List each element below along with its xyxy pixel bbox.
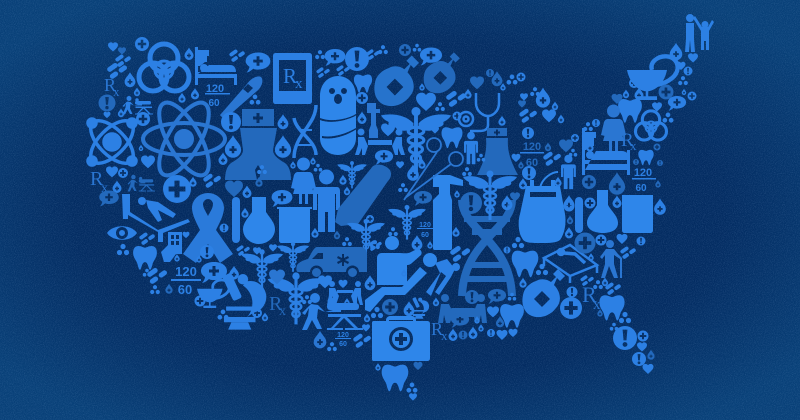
icon: two people carrying stretcher [327, 281, 363, 305]
small icons: exclamation circles [98, 47, 692, 366]
text: blood pressure south: 60 [339, 341, 347, 348]
icon: caduceus small 3 [347, 219, 385, 254]
icon: tooth northeast [618, 99, 642, 123]
icon: first aid kit [372, 316, 430, 361]
text: Rx northeast: R [621, 130, 634, 151]
icon: stethoscope [459, 93, 499, 131]
text: blood pressure gulf: 60 [421, 232, 429, 239]
icon: prescription tablet [273, 53, 312, 104]
icon: small microscope east [412, 297, 429, 319]
icon: surgical scissors [404, 138, 463, 200]
icon: thermometer [220, 76, 262, 118]
icon: woman northeast [601, 104, 626, 151]
small icons: drops [112, 43, 686, 371]
icon: paramedic with stretcher south [302, 293, 363, 330]
icon: caduceus lakes [381, 107, 451, 171]
icon: hygeia bowl west [197, 280, 229, 308]
icon: ambulance [296, 247, 367, 277]
text: Rx Gulf [582, 282, 601, 313]
icon: speech bubble southwest [201, 262, 227, 283]
icon: two people with stretcher north central [355, 128, 405, 155]
text: Rx Gulf: R [582, 282, 597, 307]
text: Rx southwest: x [279, 304, 286, 319]
icon: large vial with handle [519, 172, 565, 243]
icon: swaddled baby [320, 76, 356, 155]
small icons: plus circles [118, 37, 696, 342]
text: blood pressure great lakes [520, 141, 544, 169]
text: Rx Gulf: x [593, 297, 601, 313]
text: blood pressure west top: 120 [206, 83, 224, 95]
icon: nurse bust [225, 128, 291, 180]
icon: test tube east [575, 197, 583, 233]
text: Rx west coast: x [101, 181, 108, 196]
icon: test tube west [232, 197, 240, 243]
icon: tooth midwest [442, 127, 462, 148]
text: blood pressure southwest: 120 [175, 264, 197, 279]
icon: stretcher team south [438, 294, 487, 323]
text: Rx northeast: x [630, 138, 637, 153]
text: blood pressure great lakes: 60 [526, 157, 538, 169]
map of icons [84, 14, 714, 401]
text: blood pressure south: 120 [337, 332, 349, 339]
icon: biohazard east [636, 111, 666, 140]
icon: carrying person [426, 259, 460, 296]
icon: glucose meter north [374, 56, 419, 106]
icon: prescription tablet: x [295, 76, 303, 92]
text: Rx west coast [90, 168, 108, 196]
text: Rx Texas: x [441, 328, 448, 343]
icon: dental drill [367, 103, 380, 138]
text: Rx northwest [104, 75, 120, 99]
icon: biohazard west [139, 44, 189, 91]
icon: caduceus east [463, 170, 517, 220]
icon: old man with cane [600, 240, 622, 278]
icon: prescription tablet: R [283, 64, 297, 88]
icon: caduceus large west [268, 272, 324, 324]
icon: caduceus gulf [388, 205, 426, 240]
icon: caduceus small 1 [241, 249, 283, 288]
icon: glucose meter north east [424, 52, 460, 93]
text: blood pressure west top [205, 83, 230, 109]
icon: nurse cap [242, 109, 274, 126]
icon: DNA small [294, 105, 316, 158]
icon: woman west [291, 158, 316, 204]
text: Rx northwest: x [113, 84, 120, 99]
text: Rx southwest: R [269, 293, 283, 315]
text: blood pressure south [335, 332, 351, 348]
text: blood pressure east: 120 [634, 167, 652, 179]
icon: atom large [143, 95, 225, 183]
icon: hospital bed with drip west [195, 47, 237, 85]
text: blood pressure east [632, 167, 656, 194]
icon: awareness ribbon [183, 193, 233, 263]
icon: man midwest [464, 132, 478, 164]
icon: tooth southwest [133, 246, 157, 270]
text: blood pressure southwest: 60 [178, 282, 192, 297]
icon: large tube [335, 165, 391, 226]
icon: person with stretcher west [122, 96, 153, 114]
text: Rx northwest: R [104, 75, 116, 95]
icon: isometric hospital bed west [122, 194, 190, 242]
icon: hospital bed east [582, 128, 630, 175]
icon: hygeia bowl northeast [627, 56, 678, 100]
icon: flask west [243, 197, 275, 244]
text: blood pressure gulf: 120 [419, 222, 431, 229]
small icons: molecules [117, 44, 688, 393]
icon: spray bottle [433, 175, 463, 250]
text: blood pressure great lakes: 120 [523, 141, 541, 153]
icon: eye [107, 226, 137, 240]
icon: caduceus small 4 [337, 161, 367, 188]
icon: nurse dark east [477, 128, 518, 175]
text: Rx Texas [431, 319, 448, 343]
icon: microscope west [222, 273, 266, 330]
icon: tooth south [512, 251, 538, 277]
icon: man west [313, 170, 340, 232]
text: blood pressure east: 60 [635, 183, 647, 194]
icon: flask east [587, 190, 618, 233]
small icons: pills [106, 49, 637, 349]
text: blood pressure west top: 60 [208, 98, 220, 109]
text: blood pressure gulf [417, 222, 433, 239]
icon: people with raised arms [685, 14, 714, 52]
icon: atom small [84, 114, 140, 170]
text: Rx southwest [269, 293, 286, 319]
text: Rx west coast: R [90, 168, 104, 190]
icon: isometric hospital bed east [544, 245, 597, 283]
icon: tooth Florida [599, 295, 625, 320]
icon: speech bubble with plus [246, 52, 270, 72]
small icons: speech bubbles [99, 48, 686, 328]
icon: caduceus small 2 [277, 242, 309, 272]
icon: beaker west [277, 207, 312, 243]
icon: man east [561, 155, 576, 189]
icon: beaker east [622, 195, 653, 233]
icon: glucose meter south [522, 269, 565, 317]
icon: person in reclining chair [365, 236, 437, 312]
icon: DNA large [462, 200, 512, 296]
text: blood pressure southwest [171, 264, 201, 297]
text: Rx Texas: R [431, 319, 443, 339]
icon: tooth Florida gulf [382, 365, 408, 391]
small icons: teeth [354, 75, 654, 328]
icon: chart in hand [161, 232, 182, 262]
small icons: hearts [104, 42, 698, 401]
icon: person with stretcher dark west [128, 175, 155, 191]
